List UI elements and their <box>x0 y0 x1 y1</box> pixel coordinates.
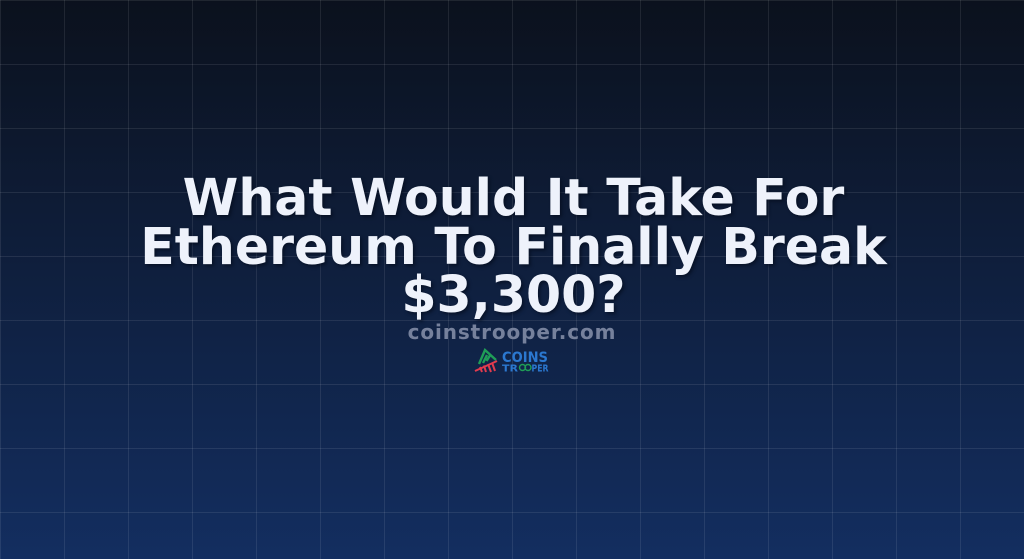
wordmark: COINS: COINS <box>502 350 548 366</box>
logo: Coins Trooper <box>474 348 549 374</box>
title: What Would It Take For <box>183 168 844 227</box>
title: Ethereum To Finally Break <box>140 216 887 276</box>
title <box>140 168 888 324</box>
wordmark: TROOPER <box>502 364 549 374</box>
title: $3,300? <box>401 265 626 324</box>
icon: green and red chart peaks <box>475 350 497 372</box>
website label: coinstrooper.com <box>408 320 616 344</box>
